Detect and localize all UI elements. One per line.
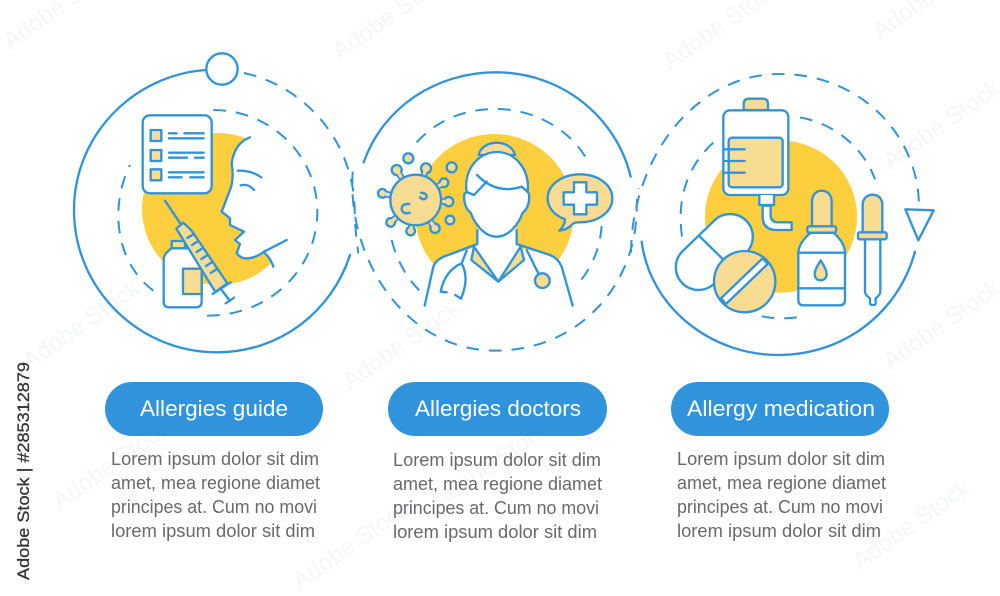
dashed inner ring top — [417, 109, 589, 164]
step 1 body text: lorem ipsum dolor sit dim — [111, 520, 315, 541]
step 3 label pill: Allergy medication — [687, 396, 875, 421]
dashed inner ring top — [800, 117, 875, 179]
step 3 label pill — [671, 382, 889, 436]
dashed inner ring bottom — [762, 316, 805, 318]
dashed inner ring right — [576, 226, 602, 286]
background watermark: Adobe Stock — [288, 494, 416, 595]
icon: capsule — [666, 205, 762, 299]
step 1 body text: Lorem ipsum dolor sit dim — [111, 448, 319, 469]
icon: checklist — [143, 115, 212, 193]
step 2 body text — [393, 449, 602, 542]
dashed outer arc — [244, 73, 358, 253]
step 2 label pill: Allergies doctors — [415, 396, 581, 421]
step 3 body text: principes at. Cum no movi — [677, 496, 883, 517]
dashed inner ring — [207, 110, 317, 316]
icon: medicine vial — [164, 241, 202, 307]
solid outer ring — [74, 70, 350, 352]
icon: syringe — [165, 201, 234, 303]
step 3 body text: Lorem ipsum dolor sit dim — [677, 448, 885, 469]
step 3 body text — [677, 448, 886, 541]
icon: IV bag — [723, 99, 792, 230]
face mask fill — [222, 133, 300, 267]
icon: speech bubble with cross — [548, 174, 612, 231]
dashed inner ring left — [681, 143, 713, 237]
step 3 body text: lorem ipsum dolor sit dim — [677, 520, 881, 541]
icon: virus — [378, 153, 457, 235]
stock watermark credit: Adobe Stock | #285312879 — [14, 362, 33, 580]
yellow circle — [705, 141, 857, 293]
yellow circle — [142, 133, 294, 285]
step 2 label pill — [388, 382, 607, 436]
step 1 label pill: Allergies guide — [140, 396, 288, 421]
dashed inner ring left — [392, 240, 421, 292]
background watermark: Adobe Stock — [848, 474, 976, 575]
background watermark: Adobe Stock — [338, 294, 466, 395]
icon: tablet — [714, 251, 775, 312]
step 1 body text: principes at. Cum no movi — [111, 496, 317, 517]
step 1 body text — [111, 448, 320, 541]
icon: doctor — [425, 143, 573, 307]
solid outer ring arc — [364, 72, 631, 177]
yellow circle — [415, 134, 574, 293]
icon: pipette — [858, 195, 887, 305]
arrowhead triangle — [905, 209, 934, 240]
step 1 body text: amet, mea regione diamet — [111, 472, 320, 493]
dashed inner ring lower left — [118, 165, 153, 291]
solid outer ring arc — [642, 242, 915, 355]
panel: allergies doctors illustration — [352, 72, 639, 351]
panel: allergy medication illustration — [631, 74, 934, 355]
step 3 body text: amet, mea regione diamet — [677, 472, 886, 493]
dashed outer ring — [352, 172, 639, 351]
icon: dropper bottle — [798, 191, 845, 305]
dashed outer ring — [631, 74, 919, 253]
background watermark: Adobe Stock — [428, 414, 556, 515]
background watermark: Adobe Stock — [48, 414, 176, 515]
icon: face profile — [222, 137, 287, 267]
step marker circle — [206, 53, 238, 85]
step 2 body text: amet, mea regione diamet — [393, 473, 602, 494]
panel: allergies guide illustration — [74, 53, 358, 352]
step 2 body text: lorem ipsum dolor sit dim — [393, 521, 597, 542]
background watermark: Adobe Stock — [18, 274, 146, 375]
step 1 label pill — [105, 382, 323, 436]
step 2 body text: principes at. Cum no movi — [393, 497, 599, 518]
step 2 body text: Lorem ipsum dolor sit dim — [393, 449, 601, 470]
